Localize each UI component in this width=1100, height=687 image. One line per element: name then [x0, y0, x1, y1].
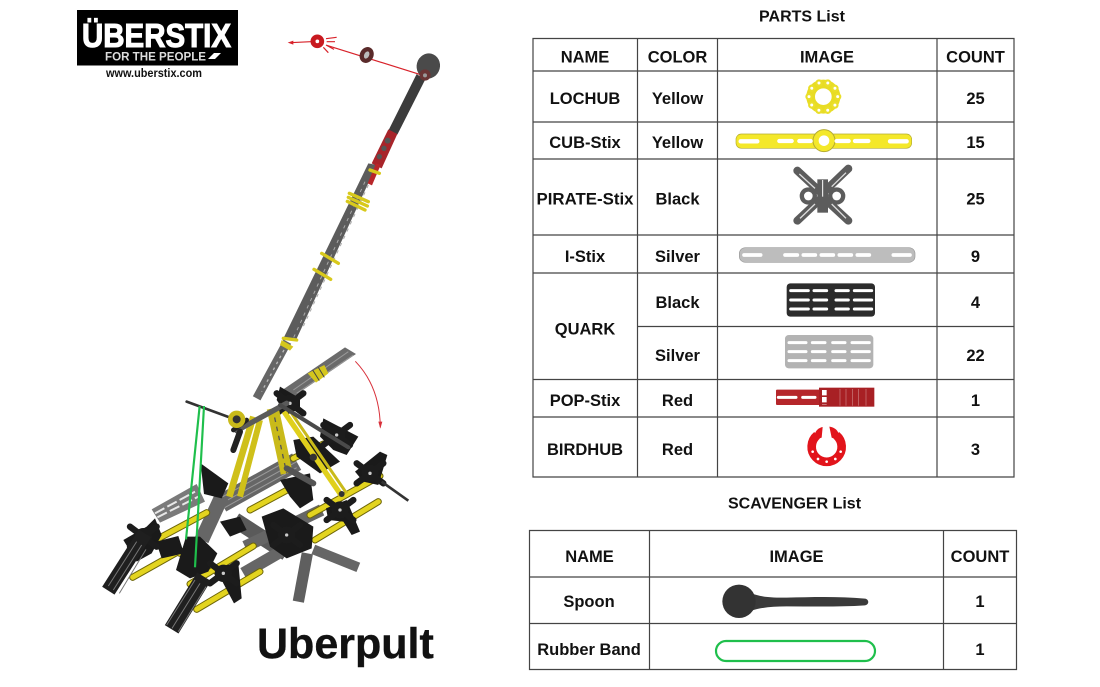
table grid	[530, 530, 1016, 670]
row: QUARK: QUARK	[555, 320, 615, 338]
yellow frame	[229, 408, 347, 498]
row: PIRATE-Stix: 25	[966, 190, 985, 208]
upper arm and throwing lever	[257, 340, 356, 403]
logo: Uberstix: FOR THE PEOPLE	[105, 50, 206, 64]
header row: NAME	[561, 48, 609, 66]
icon: quark silver	[785, 335, 873, 368]
header row	[561, 48, 1005, 66]
row: POP-Stix: Red	[662, 392, 693, 410]
row: CUB-Stix	[549, 134, 985, 152]
row: I-Stix: 9	[971, 248, 980, 266]
flying ball: red ring	[313, 37, 322, 46]
header row: IMAGE	[800, 48, 854, 66]
row: I-Stix: I-Stix	[565, 248, 606, 266]
row: BIRDHUB: Red	[662, 441, 693, 459]
row: QUARK	[555, 294, 985, 365]
icon: cub-stix	[736, 130, 912, 152]
row: I-Stix: Silver	[655, 248, 701, 266]
icon: rubber band	[716, 641, 875, 661]
spoon	[388, 51, 443, 135]
icon: pirate-stix	[797, 169, 848, 221]
black legs	[108, 482, 408, 632]
black connector clusters	[123, 387, 387, 603]
green rubber band	[186, 406, 204, 567]
row: LOCHUB: 25	[966, 90, 985, 108]
catapult base model	[108, 340, 408, 632]
row: QUARK: Black	[655, 294, 700, 312]
row: Rubber Band	[537, 641, 985, 659]
row: Spoon: 1	[975, 593, 985, 611]
row: I-Stix	[565, 248, 980, 266]
red rotation arrow	[355, 361, 382, 429]
black connector hubs	[130, 393, 383, 583]
header row: COUNT	[951, 548, 1009, 566]
header row: COUNT	[946, 48, 1005, 66]
icon: birdhub	[808, 427, 845, 466]
row: Rubber Band: Rubber Band	[537, 641, 641, 659]
title: Uberpult: Uberpult	[257, 620, 434, 668]
icon: i-stix	[739, 248, 915, 262]
grey quark plate	[152, 484, 205, 523]
yellow base bars	[133, 444, 380, 609]
row: PIRATE-Stix: PIRATE-Stix	[536, 190, 634, 208]
row: QUARK: 4	[971, 294, 981, 312]
row: POP-Stix	[550, 392, 980, 410]
catapult arm and spoon	[283, 37, 443, 340]
row: CUB-Stix: 15	[966, 134, 985, 152]
row: LOCHUB: LOCHUB	[550, 90, 620, 108]
heading: parts list: PARTS List	[759, 8, 846, 26]
row: LOCHUB	[550, 90, 985, 108]
row: PIRATE-Stix	[536, 190, 985, 208]
flying ball: dark ring	[360, 48, 373, 62]
row: CUB-Stix: CUB-Stix	[549, 134, 622, 152]
row: PIRATE-Stix: Black	[655, 190, 700, 208]
pop-stix on arm	[368, 129, 397, 185]
row: CUB-Stix: Yellow	[652, 134, 703, 152]
row: LOCHUB: Yellow	[652, 90, 703, 108]
heading: scavenger list: SCAVENGER List	[728, 496, 862, 512]
header row: NAME	[565, 548, 614, 566]
axle rods	[187, 402, 348, 483]
row: BIRDHUB	[547, 441, 980, 459]
arm beam	[283, 163, 377, 340]
row: BIRDHUB: 3	[971, 441, 980, 459]
yellow axle hub	[230, 413, 243, 426]
header row: IMAGE	[769, 548, 824, 566]
row: Spoon: Spoon	[563, 593, 615, 611]
icon: spoon	[722, 585, 868, 618]
yellow clamps on arm	[283, 170, 379, 340]
table: parts list	[533, 38, 1014, 477]
row: QUARK: 22	[966, 347, 985, 365]
flight path arrow	[288, 37, 421, 75]
icon: pop-stix	[776, 388, 874, 407]
table: scavenger list	[530, 530, 1016, 670]
icon: lochub	[809, 82, 838, 111]
row: Spoon	[563, 593, 985, 611]
row: POP-Stix: 1	[971, 392, 980, 410]
grey beams	[202, 456, 358, 602]
logo: Uberstix: www.uberstix.com	[105, 66, 202, 80]
row: QUARK: Silver	[655, 347, 701, 365]
logo: Uberstix: ÜBERSTIX	[82, 17, 231, 54]
row: POP-Stix: POP-Stix	[550, 392, 621, 410]
row: Rubber Band: 1	[975, 641, 985, 659]
header row: COLOR	[648, 48, 707, 66]
table grid	[533, 38, 1014, 477]
row: BIRDHUB: BIRDHUB	[547, 441, 623, 459]
icon: quark black	[787, 283, 875, 317]
header row	[565, 548, 1009, 566]
logo: Uberstix	[77, 10, 238, 80]
